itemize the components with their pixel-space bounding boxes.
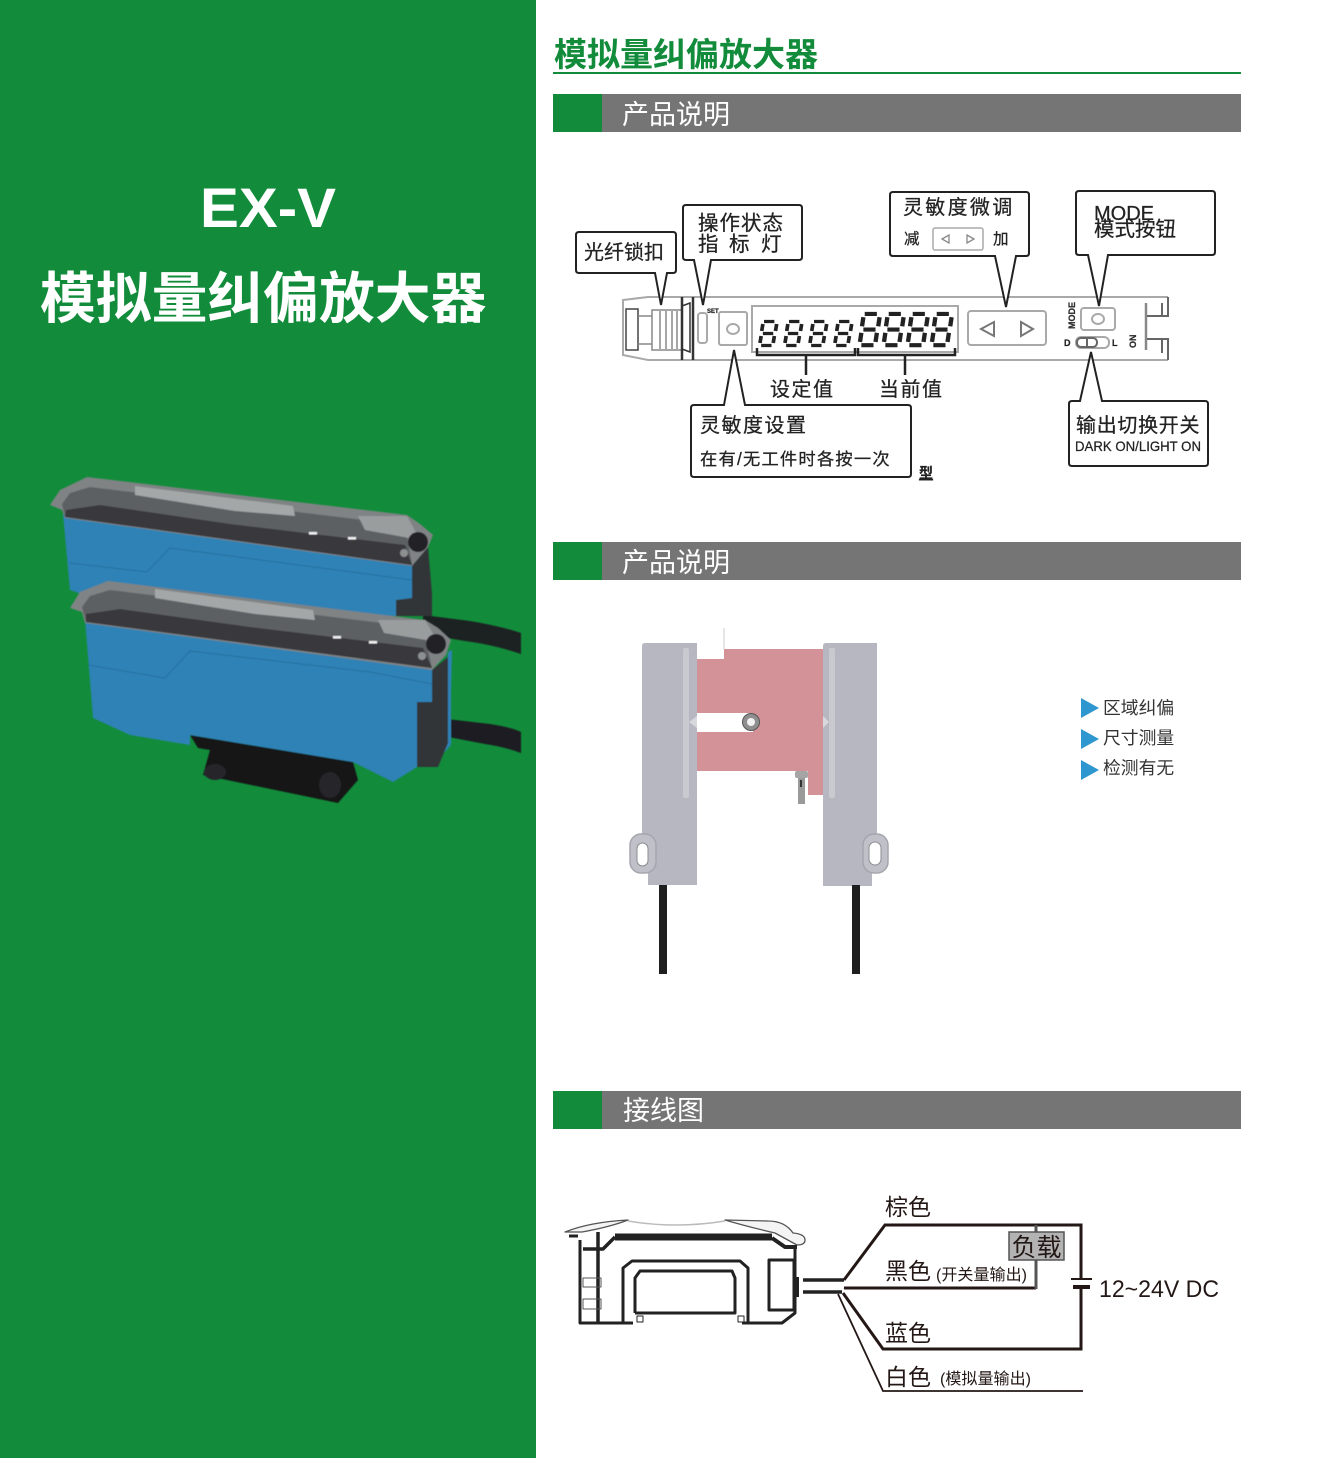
device outline xyxy=(565,1220,844,1323)
icon: bullet arrow xyxy=(1081,698,1099,718)
diagram: sensor amplifier front panel: L xyxy=(1112,338,1118,348)
item: area correction: 区域纠偏 xyxy=(1103,698,1174,718)
label: current value: 当前值 xyxy=(879,378,944,401)
callout: sensitivity trim xyxy=(890,192,1029,307)
section header: 接线图 xyxy=(553,1091,1241,1129)
section header: 产品说明 1 xyxy=(553,94,1241,132)
callout: status indicator: 指 xyxy=(698,233,720,256)
wire labels: (开关量输出) xyxy=(936,1266,1027,1284)
icon: bullet arrow xyxy=(1081,729,1099,749)
title: product name: 模拟量纠偏放大器 xyxy=(40,267,487,330)
workpiece xyxy=(697,649,823,795)
back amplifier xyxy=(50,477,521,654)
diagram: sensor amplifier front panel: D xyxy=(1064,338,1071,348)
callout: sensitivity trim: 灵敏度微调 xyxy=(903,196,1014,219)
item: presence detection: 检测有无 xyxy=(1103,758,1174,778)
left sensor arm xyxy=(630,643,697,974)
wire labels: 棕色 xyxy=(885,1194,931,1220)
battery symbol xyxy=(1071,1278,1092,1289)
wire: white analog output xyxy=(838,1294,1083,1391)
product photo: two amplifiers xyxy=(50,477,521,803)
callout: sensitivity trim: 减 xyxy=(904,230,920,248)
nut xyxy=(742,714,760,730)
main heading: 模拟量纠偏放大器 xyxy=(554,36,818,73)
small panel labels: SET xyxy=(707,309,719,315)
callout: status indicator xyxy=(683,205,802,305)
callout: output switch: 输出切换开关 xyxy=(1076,414,1200,437)
wire labels: (模拟量输出) xyxy=(940,1370,1031,1388)
section header: 产品说明 1: 产品说明 xyxy=(622,100,730,130)
callout: output switch: DARK ON/LIGHT ON xyxy=(1075,438,1201,454)
callout: sensitivity setting xyxy=(691,350,911,477)
panel: left green sidebar xyxy=(0,0,536,1458)
icon: bullet arrow xyxy=(1081,760,1099,780)
callout: status indicator: 操作状态 xyxy=(698,212,784,235)
label: set value: 设定值 xyxy=(770,378,834,401)
callout: mode button: 模式按钮 xyxy=(1094,218,1176,241)
wire labels xyxy=(885,1194,1031,1390)
diagram: sensor amplifier front panel: ON xyxy=(1128,334,1138,348)
list: applications xyxy=(1081,698,1174,780)
callout: mode button: MODE xyxy=(1094,203,1154,225)
callout: mode button xyxy=(1076,191,1215,306)
fiber lock xyxy=(626,297,693,360)
callout: status indicator: 灯 xyxy=(761,233,782,256)
section header: 产品说明 2 xyxy=(553,542,1241,580)
front amplifier xyxy=(70,581,521,803)
voltage label: 12~24V DC xyxy=(1099,1276,1219,1303)
right sensor arm xyxy=(823,643,888,974)
callout: status indicator: 标 xyxy=(729,233,750,256)
section header: 接线图: 接线图 xyxy=(623,1096,704,1126)
callout: sensitivity trim: 加 xyxy=(993,230,1009,248)
wire: blue xyxy=(843,1287,1081,1349)
section header: 产品说明 2: 产品说明 xyxy=(622,548,730,578)
callout: sensitivity setting: 灵敏度设置 xyxy=(700,414,808,437)
bolt xyxy=(795,771,808,804)
sensor body xyxy=(623,297,1168,360)
callout: fiber lock: 光纤锁扣 xyxy=(584,241,664,264)
diagram: wiring xyxy=(565,1194,1219,1391)
item: size measurement: 尺寸测量 xyxy=(1103,728,1174,748)
diagram: sensor amplifier front panel: MODE xyxy=(1067,302,1077,329)
callout: output switch xyxy=(1069,352,1208,466)
wire: black switch output xyxy=(844,1286,1036,1290)
stray mark: 型 xyxy=(919,465,933,481)
diagram: sensor amplifier front panel xyxy=(576,191,1215,481)
load box: 负载 xyxy=(1011,1234,1062,1262)
wire: load link xyxy=(1034,1225,1038,1289)
seven-segment display xyxy=(760,314,952,346)
callout: fiber lock xyxy=(576,232,676,305)
wire: brown xyxy=(844,1225,1081,1280)
diagram: fork sensor measuring a workpiece xyxy=(630,628,888,974)
callout: sensitivity setting: 在有/无工件时各按一次 xyxy=(700,449,891,469)
display brackets xyxy=(757,348,955,375)
wire labels: 黑色 xyxy=(885,1258,931,1284)
wire labels: 蓝色 xyxy=(885,1320,931,1346)
title: model name: EX-V xyxy=(200,176,336,239)
wire labels: 白色 xyxy=(885,1364,931,1390)
